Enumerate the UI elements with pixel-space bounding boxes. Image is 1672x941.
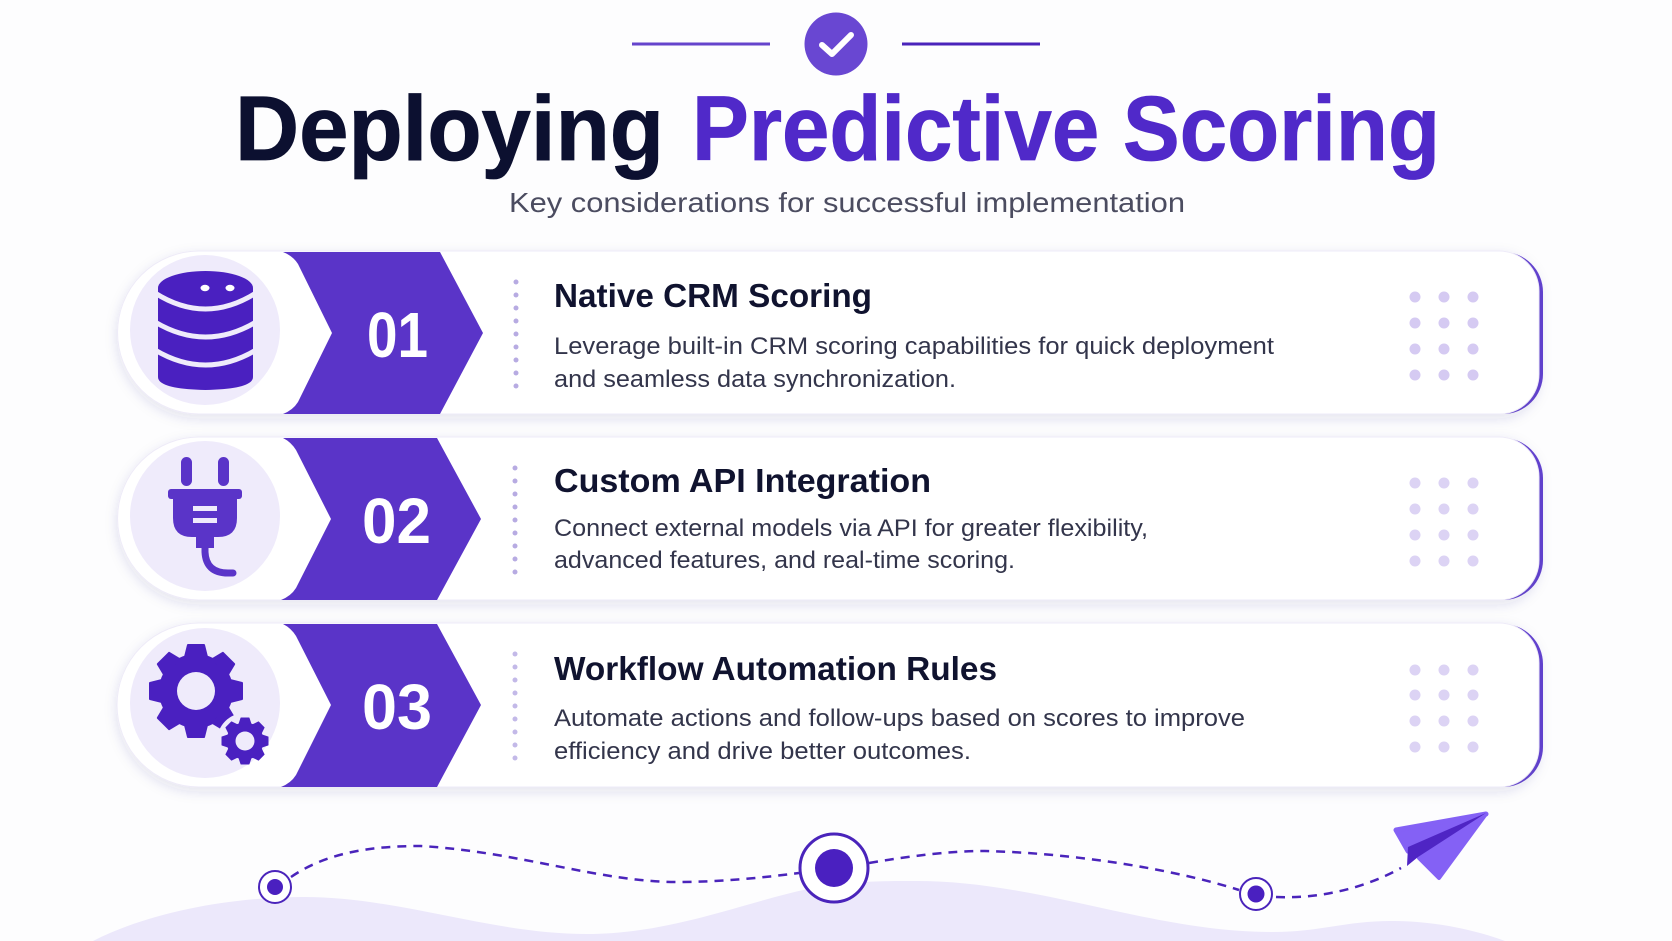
- icon: gears: [130, 628, 280, 778]
- number chevron 02: [281, 438, 481, 600]
- panel: step 2 custom API integration: [118, 437, 1543, 600]
- dot grid: [1410, 664, 1478, 752]
- description: [554, 333, 1274, 393]
- panel: step 1 native CRM scoring: [118, 251, 1543, 414]
- description: efficiency and drive better outcomes.: [554, 738, 971, 765]
- title: Deploying: [235, 78, 664, 180]
- dashed path: [291, 846, 1401, 897]
- number chevron 01: [283, 252, 483, 414]
- description: Leverage built-in CRM scoring capabilities for quick deployment: [554, 333, 1274, 360]
- marker: third node: [1240, 878, 1272, 910]
- description: [554, 515, 1148, 574]
- number chevron 02: 02: [362, 485, 431, 557]
- dotted divider: [514, 280, 518, 388]
- marker: middle node: [800, 834, 868, 902]
- dotted divider: [512, 652, 518, 760]
- number chevron 01: 01: [367, 299, 428, 371]
- background wave: [93, 881, 1505, 941]
- description: Connect external models via API for greater flexibility,: [554, 515, 1148, 542]
- dot grid: [1410, 292, 1478, 380]
- number chevron 03: [281, 624, 481, 787]
- dot grid: [1410, 478, 1478, 566]
- heading: Custom API Integration: [554, 462, 931, 499]
- heading: Workflow Automation Rules: [554, 650, 997, 687]
- heading: Native CRM Scoring: [554, 277, 872, 314]
- dotted divider: [512, 466, 518, 574]
- description: Automate actions and follow-ups based on scores to improve: [554, 705, 1245, 732]
- title: [235, 78, 1440, 180]
- icon: paper plane: [1396, 813, 1486, 878]
- subtitle: Key considerations for successful implementation: [509, 187, 1185, 218]
- panel: step 3 workflow automation rules: [117, 623, 1543, 787]
- title: Predictive Scoring: [692, 78, 1440, 180]
- description: [554, 705, 1245, 765]
- number chevron 03: 03: [362, 671, 432, 743]
- description: advanced features, and real-time scoring.: [554, 547, 1015, 574]
- header ornament: check badge with lines: [632, 12, 1040, 76]
- marker: start node: [259, 871, 291, 903]
- icon: plug: [130, 441, 280, 591]
- icon: database: [130, 255, 280, 405]
- description: and seamless data synchronization.: [554, 366, 956, 393]
